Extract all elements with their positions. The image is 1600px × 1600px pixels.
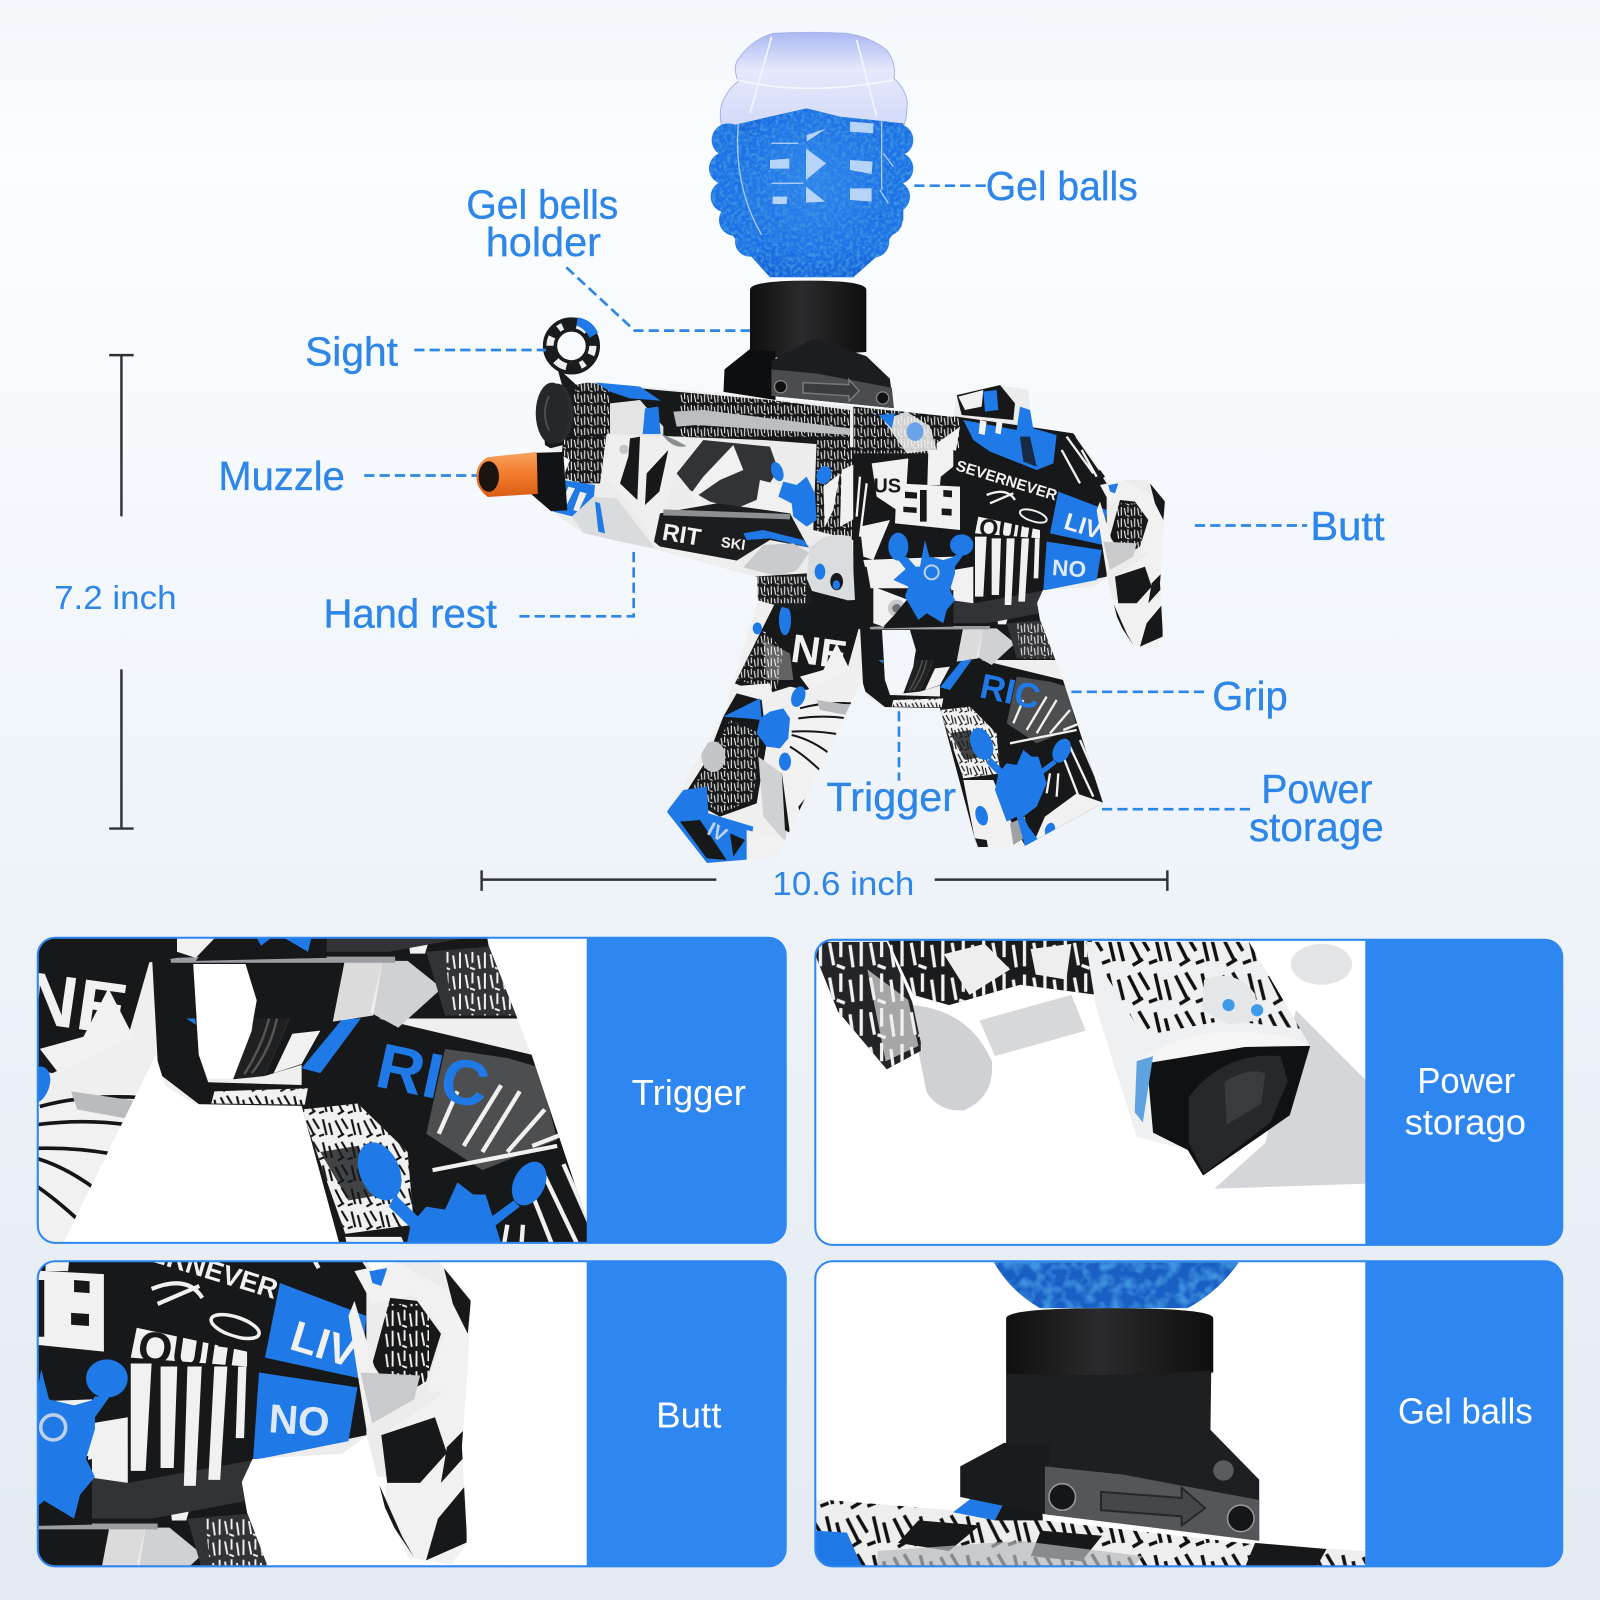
trigger caption: Trigger [632,1073,746,1113]
gel blaster illustration [476,32,1175,870]
label: Trigger: Trigger [827,774,956,820]
holder base [960,1443,1050,1514]
screws [1049,1484,1254,1532]
label: Butt: Butt [1310,503,1385,549]
height dimension 7.2 inch: 7.2 inch [54,580,177,617]
label: Power storage: Power [1261,766,1372,812]
handguard art: SKI [720,535,746,554]
magazine art: IV [703,819,731,847]
width dimension 10.6 inch [482,866,1167,903]
holder lid [1044,1430,1260,1540]
panel: Power storage [815,940,1562,1245]
label: Sight: Sight [305,328,399,374]
handguard art: RIT [660,519,703,552]
muzzle bore [479,461,499,492]
trigger close-up [0,503,741,1401]
receiver rail [816,1499,1366,1566]
trigger and guard [860,627,977,710]
grip art: RIC [977,667,1044,717]
panel: Gel balls [815,1261,1562,1567]
arrow [1101,1488,1205,1526]
power storage caption line two: storago [1405,1103,1526,1143]
skull art [753,535,855,610]
receiver art: US [873,476,901,498]
gel balls caption: Gel balls [1398,1391,1533,1431]
button [1213,1460,1234,1481]
label: Gel bells holder: Gel bells [466,181,618,227]
front sight ring [550,317,598,390]
holder ring [1006,1308,1213,1377]
panel: Trigger [36,936,787,1244]
clear upper shell [720,32,907,127]
label: Gel balls: Gel balls [986,163,1138,209]
width dimension 10.6 inch: 10.6 inch [772,866,914,903]
gun body with graffiti wrap [530,377,1175,870]
label: Hand rest: Hand rest [323,591,498,637]
shell highlights [737,37,893,117]
label: Gel bells holder [466,181,750,331]
receiver art: SEVERNEVER [954,458,1059,504]
label: Power storage [1102,766,1384,850]
label: Muzzle: Muzzle [218,453,345,499]
height dimension 7.2 inch [54,355,177,829]
receiver art: LIV [1061,508,1105,545]
trigger caption tab [587,938,786,1243]
muzzle collar [529,452,567,511]
receiver art: NO [1051,554,1087,582]
icon: sight knob [536,383,573,444]
gel balls border [815,1261,1562,1566]
trigger border [38,938,786,1243]
magazine art: NE [788,627,850,678]
grip top [870,600,1063,665]
blue gel balls [709,108,913,277]
upper receiver, handguard and stock [530,377,1175,665]
hopper reflections [770,122,873,204]
power storage caption tab [1365,940,1562,1245]
gel balls caption tab [1365,1261,1562,1566]
power storage border [815,940,1562,1245]
butt caption: Butt [656,1396,722,1436]
magazine and grip [660,590,1110,870]
label: Power storage: storage [1249,804,1384,850]
butt caption tab [587,1261,786,1566]
hopper holder cylinder [750,281,866,359]
holder lower [1006,1370,1211,1465]
label: Trigger [827,711,956,820]
gel balls close-up [815,1262,1365,1567]
panel: Butt [36,1260,787,1568]
handguard art [544,382,854,576]
hopper plate [771,369,894,408]
label: Hand rest [323,548,634,637]
label: Gel bells holder: holder [486,219,601,265]
receiver art: QUIT [977,514,1039,549]
hopper base [723,349,776,400]
holder plate [1045,1466,1259,1541]
screws [774,381,889,404]
power storage caption: Power [1417,1061,1515,1101]
gel ball hopper [709,32,913,277]
gel ball base [994,1262,1239,1308]
hopper lid [771,339,894,408]
butt border [38,1261,786,1566]
orange muzzle tip [476,452,538,497]
magazine art [667,600,867,867]
arrow [803,380,859,401]
receiver art [853,385,1165,650]
power storage close-up [815,940,1367,1189]
butt close-up [38,1262,471,1566]
grip art [940,650,1107,850]
label: Grip: Grip [1212,673,1288,719]
